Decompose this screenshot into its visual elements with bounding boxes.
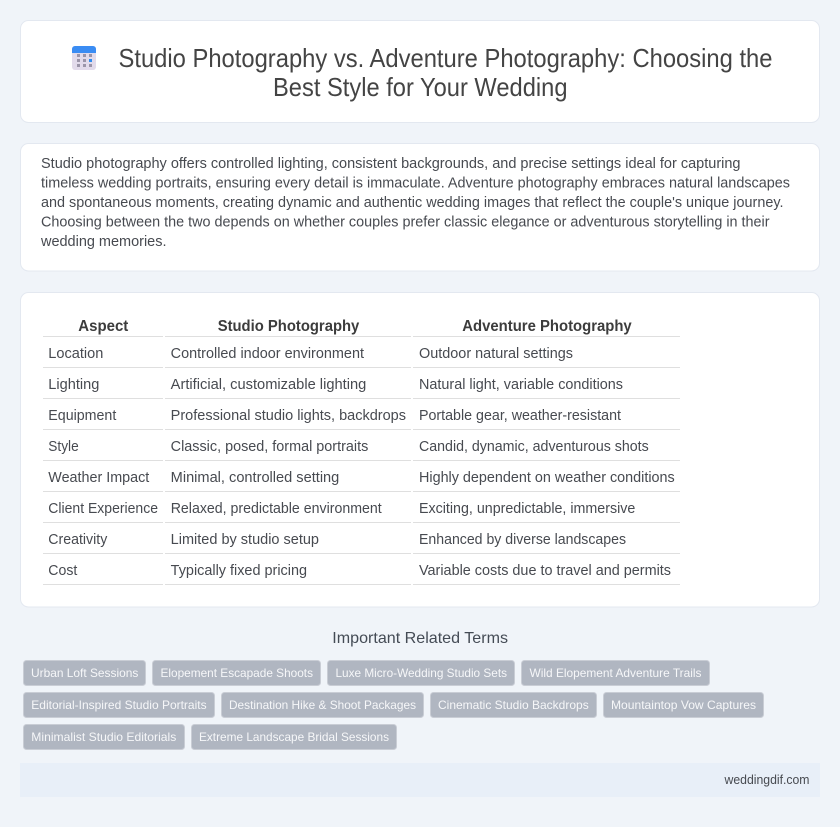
- text block: summary paragraph: and spontaneous moments, creating dynamic and authentic wedding images that reflect the couple's unique journey.: [41, 195, 783, 211]
- table row: creativity: Creativity: [48, 532, 108, 548]
- heading: important related terms: Important Related Terms: [332, 630, 508, 647]
- table row: style: [48, 439, 649, 455]
- title: Studio Photography vs. Adventure Photography: Choosing the: [118, 45, 772, 73]
- table header row: Aspect: [78, 318, 129, 335]
- table row: location: Controlled indoor environment: [171, 346, 364, 362]
- table row: equipment: Professional studio lights, backdrops: [171, 408, 406, 424]
- table row: cost: Typically fixed pricing: [171, 563, 307, 579]
- table row: lighting: Natural light, variable conditions: [419, 377, 623, 393]
- table row: weather impact: [48, 470, 675, 486]
- icon: calendar: [72, 46, 96, 70]
- table row: style: Candid, dynamic, adventurous shots: [419, 439, 649, 455]
- table row: equipment: [48, 408, 621, 424]
- related terms tags: Mountaintop Vow Captures: [611, 698, 756, 712]
- footer source text: weddingdif.com: [724, 772, 810, 787]
- table row: lighting: Lighting: [48, 377, 99, 393]
- table header row: Adventure Photography: [462, 318, 632, 335]
- table row: style: Classic, posed, formal portraits: [171, 439, 368, 455]
- table row: creativity: Enhanced by diverse landscapes: [419, 532, 626, 548]
- table row: weather impact: Highly dependent on weather conditions: [419, 470, 675, 486]
- table row: client experience: Exciting, unpredictable, immersive: [419, 501, 635, 517]
- table row: style: Style: [48, 439, 79, 455]
- text block: summary paragraph: Studio photography offers controlled lighting, consistent backgrounds, and precise settings ideal for capturing: [41, 156, 740, 172]
- text block: summary paragraph: wedding memories.: [40, 234, 166, 250]
- related terms tags: Wild Elopement Adventure Trails: [530, 666, 702, 680]
- table row: location: Location: [48, 346, 103, 362]
- table row: client experience: Relaxed, predictable environment: [171, 501, 382, 517]
- table row: client experience: [48, 501, 635, 517]
- table row: creativity: Limited by studio setup: [171, 532, 319, 548]
- title: Best Style for Your Wedding: [273, 74, 568, 102]
- table row: creativity: [48, 532, 626, 548]
- table row: equipment: Equipment: [48, 408, 116, 424]
- text block: summary paragraph: Choosing between the two depends on whether couples prefer classic elegance or adventurous storytelling in their: [41, 214, 770, 230]
- related terms tags: Extreme Landscape Bridal Sessions: [199, 730, 389, 744]
- table header row: [78, 318, 632, 335]
- text block: summary paragraph: [40, 156, 790, 250]
- related terms tags: Cinematic Studio Backdrops: [438, 698, 589, 712]
- footer bar: [20, 763, 820, 797]
- table row: location: Outdoor natural settings: [419, 346, 573, 362]
- table row: location: [48, 346, 573, 362]
- title: [118, 45, 772, 102]
- related terms tags: Minimalist Studio Editorials: [31, 730, 176, 744]
- panel: comparison table: [20, 292, 820, 607]
- related terms tags: Luxe Micro-Wedding Studio Sets: [336, 666, 507, 680]
- related terms tags: Destination Hike & Shoot Packages: [229, 698, 416, 712]
- table row: weather impact: Weather Impact: [48, 470, 149, 486]
- related terms tags: [24, 660, 764, 750]
- table row: client experience: Client Experience: [48, 501, 158, 517]
- table row: equipment: Portable gear, weather-resistant: [419, 408, 621, 424]
- table row: cost: Variable costs due to travel and permits: [419, 563, 671, 579]
- related terms tags: Editorial-Inspired Studio Portraits: [31, 698, 207, 712]
- table row: lighting: Artificial, customizable lighting: [171, 377, 366, 393]
- panel: title header: [20, 20, 820, 122]
- related terms tags: Urban Loft Sessions: [31, 666, 138, 680]
- table row: cost: Cost: [48, 563, 77, 579]
- text block: summary paragraph: timeless wedding portraits, ensuring every detail is immaculate. Adventure photography embraces natural landscapes: [41, 176, 790, 192]
- related terms tags: Elopement Escapade Shoots: [160, 666, 313, 680]
- panel: summary text: [20, 144, 820, 271]
- table row: lighting: [48, 377, 623, 393]
- table row: cost: [48, 563, 671, 579]
- table header row: Studio Photography: [218, 318, 359, 335]
- table row: weather impact: Minimal, controlled setting: [171, 470, 339, 486]
